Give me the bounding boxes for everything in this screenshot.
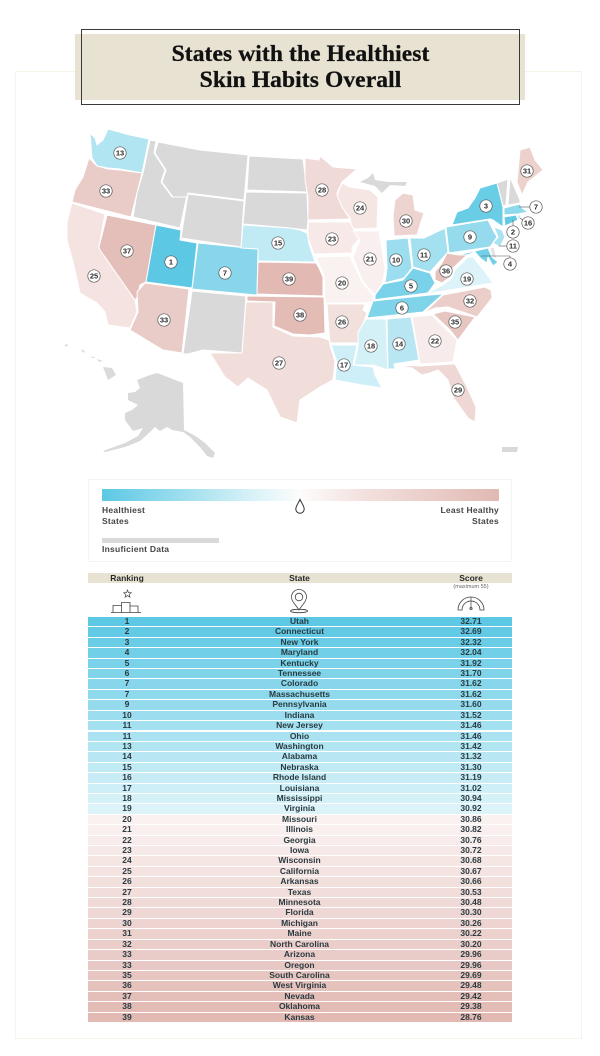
row 13: 31.42 [460, 741, 482, 751]
icon: water drop [295, 498, 305, 514]
state: Michigan: 30 [402, 217, 410, 226]
row 12: 11 [122, 730, 132, 740]
row 6: Tennessee [278, 668, 321, 678]
state: Kentucky [375, 268, 435, 300]
state: Nebraska [241, 225, 315, 262]
state: Indiana [385, 238, 412, 283]
icon: gauge [458, 596, 484, 610]
row 9 [88, 700, 512, 710]
state: Florida: 29 [454, 386, 462, 395]
row 20: Missouri [282, 814, 317, 824]
row 6: 31.70 [460, 668, 482, 678]
row 21: 30.82 [460, 824, 482, 834]
row 2 [88, 627, 512, 637]
row 27: 30.53 [460, 887, 482, 897]
state: North Carolina: 32 [466, 297, 474, 306]
state: Iowa [308, 222, 359, 254]
row 17: 17 [122, 783, 132, 793]
row 27 [88, 888, 512, 897]
row 5: 5 [125, 658, 129, 668]
state: New Hampshire [508, 177, 520, 205]
row 25: California [280, 866, 319, 876]
row 22: 30.76 [460, 835, 482, 845]
row 11: New Jersey [276, 720, 323, 730]
row 26: 26 [122, 876, 132, 886]
row 38: Oklahoma [279, 1001, 320, 1011]
row 16: 16 [122, 772, 132, 782]
row 4: Maryland [281, 647, 318, 657]
state: New Jersey [493, 227, 505, 247]
leader labels: northeast states: 11 [509, 242, 517, 251]
row 33: 33 [122, 949, 132, 959]
row 33: 29.96 [460, 949, 482, 959]
row 1: 1 [125, 616, 129, 626]
row 32 [88, 940, 512, 949]
state: Pennsylvania: 9 [468, 233, 472, 242]
state: Utah: 1 [169, 258, 173, 267]
row 12: Ohio [290, 730, 309, 740]
state: Iowa: 23 [328, 235, 336, 244]
row 17 [88, 784, 512, 793]
row 6 [88, 669, 512, 678]
label: healthiest [102, 505, 145, 526]
row 35: South Carolina [269, 970, 330, 980]
row 23: 23 [122, 845, 132, 855]
row 14: 14 [122, 751, 132, 761]
row 19 [88, 804, 512, 814]
leader labels: northeast states [481, 201, 542, 270]
state: Kansas: 39 [285, 275, 293, 284]
row 8: Massachusetts [269, 689, 330, 699]
state: Arizona: 33 [160, 316, 168, 325]
state: Minnesota [305, 156, 357, 220]
row 30 [88, 919, 512, 928]
state: Alabama [387, 317, 419, 369]
row 18: Mississippi [277, 793, 322, 803]
row 11: 31.46 [460, 720, 482, 730]
row 30: Michigan [281, 918, 318, 928]
row 33: Arizona [284, 949, 315, 959]
row 24 [88, 856, 512, 866]
row 25: 30.67 [460, 866, 482, 876]
state: Arizona [130, 283, 189, 353]
row 10: 10 [122, 710, 132, 720]
state: Nevada: 37 [123, 247, 131, 256]
row 15: 15 [122, 762, 132, 772]
state: Wisconsin [337, 183, 378, 229]
state: Maine: 31 [523, 167, 531, 176]
Michigan upper peninsula [360, 173, 407, 193]
state: Vermont [497, 179, 508, 206]
row 32: 32 [122, 939, 132, 949]
state: Florida [397, 364, 476, 422]
row 23: 30.72 [460, 845, 482, 855]
row 13: Washington [275, 741, 324, 751]
row 21: 21 [122, 824, 132, 834]
state: Oregon: 33 [102, 187, 110, 196]
row 30: 30.26 [460, 918, 482, 928]
state: Kentucky: 5 [409, 282, 413, 291]
state: Michigan [393, 193, 424, 236]
state: Delaware [490, 247, 497, 260]
row 34 [88, 961, 512, 970]
row 2: 32.69 [460, 626, 482, 636]
row 4 [88, 648, 512, 658]
row 38 [88, 1002, 512, 1012]
state: Montana [155, 142, 248, 200]
row 13 [88, 742, 512, 751]
row 32: 30.20 [460, 939, 482, 949]
row 11 [88, 721, 512, 730]
row 1: 32.71 [460, 616, 482, 626]
leader labels: northeast states: 16 [524, 219, 532, 228]
icon: map pin [290, 589, 308, 614]
row 37: Nevada [284, 991, 315, 1001]
row 12: 31.46 [460, 730, 482, 740]
row 31: Maine [287, 928, 312, 938]
row 21: Illinois [286, 824, 313, 834]
row 22: 22 [122, 835, 132, 845]
row 10: Indiana [285, 710, 314, 720]
state: Mississippi: 18 [367, 342, 375, 351]
row 3: New York [281, 637, 318, 647]
state: Georgia: 22 [431, 337, 439, 346]
state: Illinois [353, 231, 385, 295]
row 31 [88, 929, 512, 939]
column: ranking: Ranking [110, 573, 144, 583]
map of US states [64, 130, 542, 458]
title background [75, 34, 525, 100]
state: South Carolina [433, 311, 475, 340]
row 28: Minnesota [278, 897, 321, 907]
row 20 [88, 815, 512, 824]
row 37: 29.42 [460, 991, 482, 1001]
row 18: 30.94 [460, 793, 482, 803]
row 10: 31.52 [460, 710, 482, 720]
row 5: Kentucky [280, 658, 319, 668]
row 39 [88, 1013, 512, 1022]
state: Alaska [103, 373, 215, 458]
row 37 [88, 992, 512, 1001]
column: score: Score [459, 573, 483, 583]
row 9: 9 [125, 699, 129, 709]
row 14: 31.32 [460, 751, 482, 761]
state: Virginia: 19 [463, 275, 471, 284]
row 24: 30.68 [460, 855, 482, 865]
row 13: 13 [122, 741, 132, 751]
row 35: 35 [122, 970, 132, 980]
state: Ohio [410, 228, 448, 272]
row 33 [88, 950, 512, 960]
label: healthiest: States [102, 516, 129, 526]
row 34: 29.96 [460, 960, 482, 970]
state: Oregon [72, 158, 142, 217]
row 29: 29 [122, 907, 132, 917]
row 2: Connecticut [275, 626, 324, 636]
state: Utah [146, 225, 197, 288]
row 29 [88, 908, 512, 918]
row 4: 4 [125, 647, 129, 657]
row 18: 18 [122, 793, 132, 803]
state: California: 25 [90, 272, 98, 281]
state: Washington: 13 [116, 149, 124, 158]
title text: Skin Habits Overall [200, 67, 401, 93]
row 39: 39 [122, 1012, 132, 1022]
label: least healthy: Least Healthy [440, 505, 499, 515]
row 34: Oregon [284, 960, 315, 970]
row 25: 25 [122, 866, 132, 876]
row 20: 20 [122, 814, 132, 824]
row 16: 31.19 [460, 772, 482, 782]
row 1 [88, 617, 512, 626]
label: least healthy: States [472, 516, 499, 526]
row 17: Louisiana [280, 783, 319, 793]
row 4: 32.04 [460, 647, 482, 657]
row 26 [88, 877, 512, 887]
legend panel [88, 479, 512, 562]
row 22 [88, 836, 512, 845]
row 7: 7 [125, 678, 129, 688]
row 37: 37 [122, 991, 132, 1001]
leader labels: northeast states: 2 [511, 228, 515, 237]
state: Idaho [133, 140, 187, 228]
row 36: 29.48 [460, 980, 482, 990]
row 7: Colorado [281, 678, 318, 688]
state: Massachusetts [504, 204, 528, 215]
row 28: 28 [122, 897, 132, 907]
state: Connecticut [504, 215, 518, 226]
row 19: 30.92 [460, 803, 482, 813]
state: West Virginia [435, 253, 467, 283]
row 29: 30.30 [460, 907, 482, 917]
state: Pennsylvania [446, 220, 497, 253]
row 36: 36 [122, 980, 132, 990]
state: Missouri: 20 [338, 279, 346, 288]
row 3 [88, 638, 512, 647]
row 30: 30 [122, 918, 132, 928]
row 29: Florida [285, 907, 314, 917]
title text [172, 41, 430, 93]
row 35: 29.69 [460, 970, 482, 980]
column: state: State [289, 573, 310, 583]
state: Alabama: 14 [395, 340, 404, 349]
row 8: 31.62 [460, 689, 482, 699]
row 24: 24 [122, 855, 132, 865]
state: Rhode Island [517, 215, 521, 220]
state: New Mexico [183, 291, 246, 354]
row 14: Alabama [282, 751, 317, 761]
state: Tennessee [367, 294, 443, 318]
state: Washington [90, 129, 149, 173]
state: California [67, 203, 137, 328]
state: Colorado: 7 [223, 269, 227, 278]
row 19: 19 [122, 803, 132, 813]
row 28: 30.48 [460, 897, 482, 907]
label: healthiest: Healthiest [102, 505, 145, 515]
row 27: 27 [122, 887, 132, 897]
leader labels: northeast states: 4 [508, 260, 513, 269]
row 9: 31.60 [460, 699, 482, 709]
row 9: Pennsylvania [272, 699, 327, 709]
row 16 [88, 773, 512, 783]
state: Wyoming [181, 194, 244, 247]
insufficient data swatch [102, 538, 219, 543]
title border [81, 29, 520, 105]
row 16: Rhode Island [273, 772, 326, 782]
state: Texas: 27 [275, 359, 283, 368]
row 10 [88, 711, 512, 720]
state: Ohio: 11 [420, 251, 428, 260]
row 22: Georgia [283, 835, 316, 845]
state: North Dakota [247, 156, 307, 192]
state: Nebraska: 15 [274, 239, 282, 248]
state: Arkansas: 26 [338, 318, 346, 327]
row 15: 31.30 [460, 762, 482, 772]
state: Georgia [412, 315, 457, 364]
row 3: 32.32 [460, 637, 482, 647]
state: Maryland [458, 248, 498, 266]
state: Kansas [257, 262, 323, 296]
state: Louisiana [331, 345, 382, 388]
state: Minnesota: 28 [318, 186, 326, 195]
row 38: 38 [122, 1001, 132, 1011]
territory: Puerto Rico [502, 447, 518, 452]
row 19: Virginia [284, 803, 315, 813]
row 39: Kansas [284, 1012, 315, 1022]
row 31: 31 [122, 928, 132, 938]
state: South Dakota [243, 192, 308, 230]
row 25 [88, 867, 512, 876]
row 26: 30.66 [460, 876, 482, 886]
title banner [75, 29, 525, 105]
state: Mississippi [354, 319, 388, 370]
row 36 [88, 981, 512, 991]
row 35 [88, 971, 512, 980]
state: South Carolina: 35 [451, 318, 459, 327]
row 26: Arkansas [280, 876, 319, 886]
row 38: 29.38 [460, 1001, 482, 1011]
state: Virginia [425, 257, 493, 294]
row 1: Utah [290, 616, 309, 626]
state: Nevada [99, 215, 156, 300]
row 3: 3 [125, 637, 129, 647]
row 8 [88, 690, 512, 699]
row 5: 31.92 [460, 658, 482, 668]
row 11: 11 [122, 720, 132, 730]
row 14 [88, 752, 512, 762]
state: Wisconsin: 24 [356, 204, 365, 213]
state: Colorado [192, 243, 258, 295]
row 7: 31.62 [460, 678, 482, 688]
state: Oklahoma [247, 296, 325, 335]
state: Oklahoma: 38 [296, 311, 304, 320]
row 20: 30.86 [460, 814, 482, 824]
state: Indiana: 10 [392, 256, 400, 265]
leader labels: northeast states: 7 [534, 203, 538, 212]
row 5 [88, 659, 512, 668]
row 2: 2 [125, 626, 129, 636]
row 36: West Virginia [273, 980, 326, 990]
state: Tennessee: 6 [400, 304, 404, 313]
row 7 [88, 679, 512, 689]
state: Hawaii [64, 344, 116, 380]
row 15 [88, 763, 512, 772]
row 6: 6 [125, 668, 129, 678]
row 34: 33 [122, 960, 132, 970]
row 24: Wisconsin [278, 855, 321, 865]
state: New York [452, 183, 503, 227]
row 28 [88, 898, 512, 907]
row 15: Nebraska [280, 762, 319, 772]
state: West Virginia: 36 [442, 267, 450, 276]
row 8: 7 [125, 689, 129, 699]
state: Louisiana: 17 [340, 361, 348, 370]
state: Maine [517, 147, 543, 195]
state: Illinois: 21 [366, 255, 374, 264]
row 18 [88, 794, 512, 803]
row 27: Texas [288, 887, 311, 897]
label: least healthy [440, 505, 499, 526]
title text: States with the Healthiest [172, 41, 429, 67]
row 23 [88, 846, 512, 855]
row 21 [88, 825, 512, 835]
row 31: 30.22 [460, 928, 482, 938]
table header band [88, 573, 512, 583]
row 39: 28.76 [460, 1012, 482, 1022]
state: New York: 3 [484, 202, 488, 211]
row 17: 31.02 [460, 783, 482, 793]
row 32: North Carolina [270, 939, 329, 949]
label: insufficient data: Insuficient Data [102, 544, 169, 554]
icon: star and podium [111, 589, 141, 613]
gradient bar [102, 489, 499, 501]
state: Missouri [316, 256, 374, 303]
note: maximum score: (maximum 55) [453, 584, 489, 590]
state: North Carolina [424, 287, 492, 317]
state: Arkansas [327, 304, 367, 343]
state: Texas [210, 302, 335, 423]
row 23: Iowa [290, 845, 309, 855]
row 12 [88, 732, 512, 741]
